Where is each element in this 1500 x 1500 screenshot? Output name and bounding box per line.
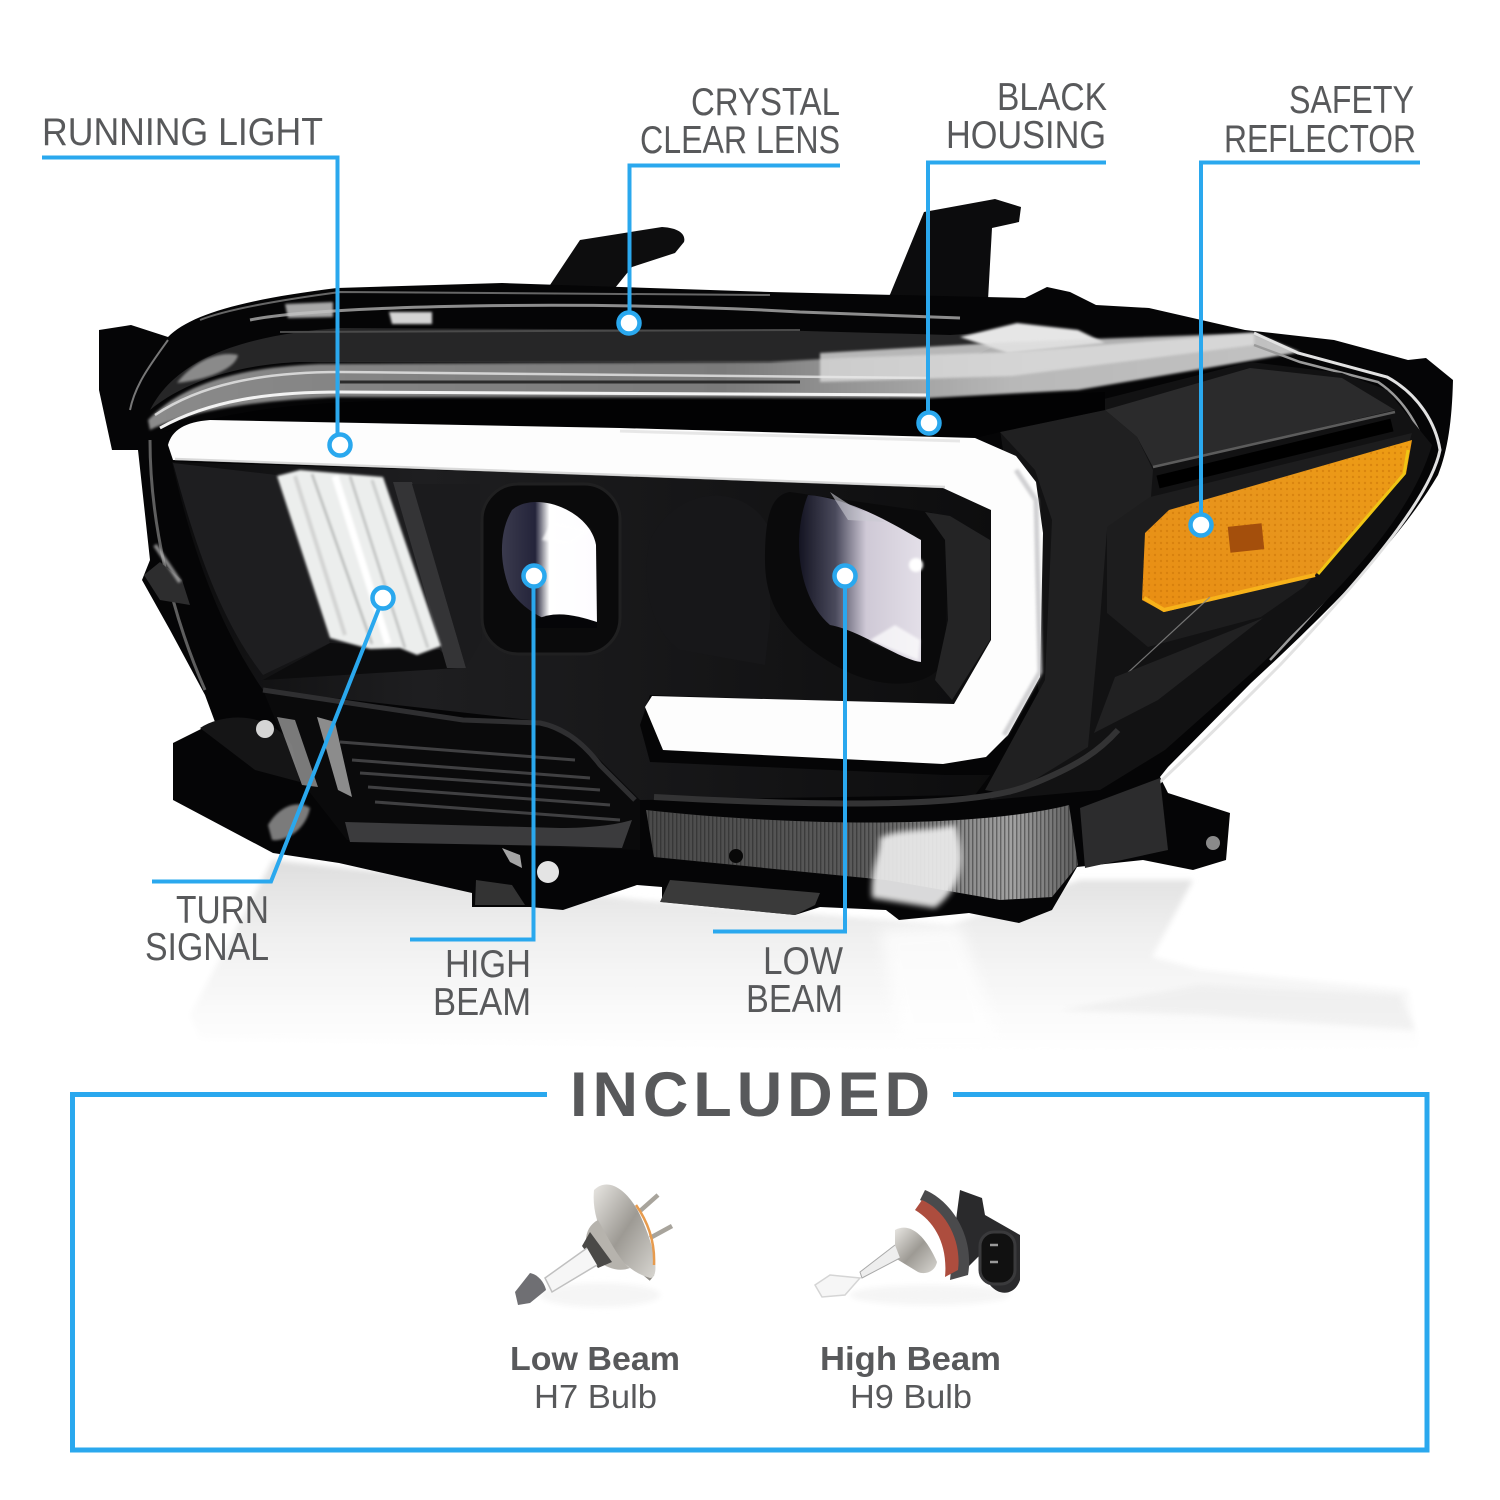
headlight floor reflection (190, 860, 1420, 1055)
callout: crystal clear lens: CLEAR LENS (640, 119, 840, 162)
grille louvers (263, 690, 640, 850)
panel: included (72, 1060, 1427, 1450)
low beam caption: Low Beam (510, 1340, 680, 1377)
callout: safety reflector: REFLECTOR (1224, 118, 1416, 161)
callout: high beam (410, 566, 544, 1024)
right projector lens (799, 492, 923, 662)
callout: safety reflector: SAFETY (1289, 79, 1414, 122)
callout: turn signal (145, 588, 394, 969)
center projector housing (646, 496, 770, 665)
turn signal LED block (277, 470, 441, 655)
left side clear lens edge (144, 440, 205, 690)
callout: black housing: BLACK (997, 76, 1107, 119)
upper black band above running light (165, 392, 1105, 438)
included heading: INCLUDED (570, 1060, 930, 1130)
left dark panel (173, 463, 330, 675)
running light strip (168, 420, 1043, 764)
lower housing sweep (1094, 618, 1263, 733)
callout: turn signal: TURN (176, 889, 269, 932)
callout: running light (42, 111, 350, 456)
callout: turn signal: SIGNAL (145, 926, 269, 969)
low beam caption: H7 Bulb (534, 1378, 657, 1415)
callout: crystal clear lens: CRYSTAL (691, 81, 840, 124)
housing shoulder (985, 410, 1153, 795)
turn signal divider (393, 482, 466, 668)
right projector bezel (765, 492, 950, 684)
callout: safety reflector (1190, 79, 1420, 536)
lower rear pivot details (200, 717, 559, 905)
panel below turn signal (263, 643, 457, 680)
right of turn signal panel (412, 484, 482, 668)
black housing panel (990, 362, 1432, 800)
high beam caption: H9 Bulb (850, 1378, 972, 1415)
icon: H7 low beam bulb (515, 1184, 672, 1307)
callout: low beam: BEAM (746, 978, 843, 1021)
callout: running light: RUNNING LIGHT (42, 111, 323, 154)
inner bezel recess (172, 462, 995, 800)
high beam caption: High Beam (820, 1340, 1001, 1377)
low beam caption (510, 1340, 680, 1415)
main body silhouette (99, 283, 1453, 923)
amber safety reflector (1142, 440, 1412, 612)
lens chrome trim strip (148, 323, 1300, 430)
left projector lens (502, 502, 597, 628)
callout: high beam: BEAM (433, 981, 531, 1024)
crystal clear lens upper band (130, 292, 1030, 410)
mounting bracket left (550, 227, 684, 288)
icon: H9 high beam bulb (815, 1190, 1020, 1305)
callout: black housing: HOUSING (946, 114, 1106, 157)
headlight assembly (99, 199, 1453, 923)
callout: low beam (713, 566, 856, 1021)
left projector bezel (482, 484, 620, 654)
callout: high beam: HIGH (445, 943, 531, 986)
mounting bracket right (889, 199, 1021, 300)
amber side reflector surround (1107, 433, 1412, 647)
lower clear lens strip (646, 778, 1220, 915)
high beam caption (820, 1340, 1001, 1415)
housing upper right band (1105, 368, 1395, 482)
housing scratch (1120, 597, 1210, 680)
callout: low beam: LOW (763, 940, 843, 983)
included frame (72, 1094, 1427, 1450)
callout: black housing (918, 76, 1107, 434)
lower right frame line (654, 730, 1118, 804)
right lens edge trim (1135, 333, 1440, 805)
callout: crystal clear lens (618, 81, 840, 334)
